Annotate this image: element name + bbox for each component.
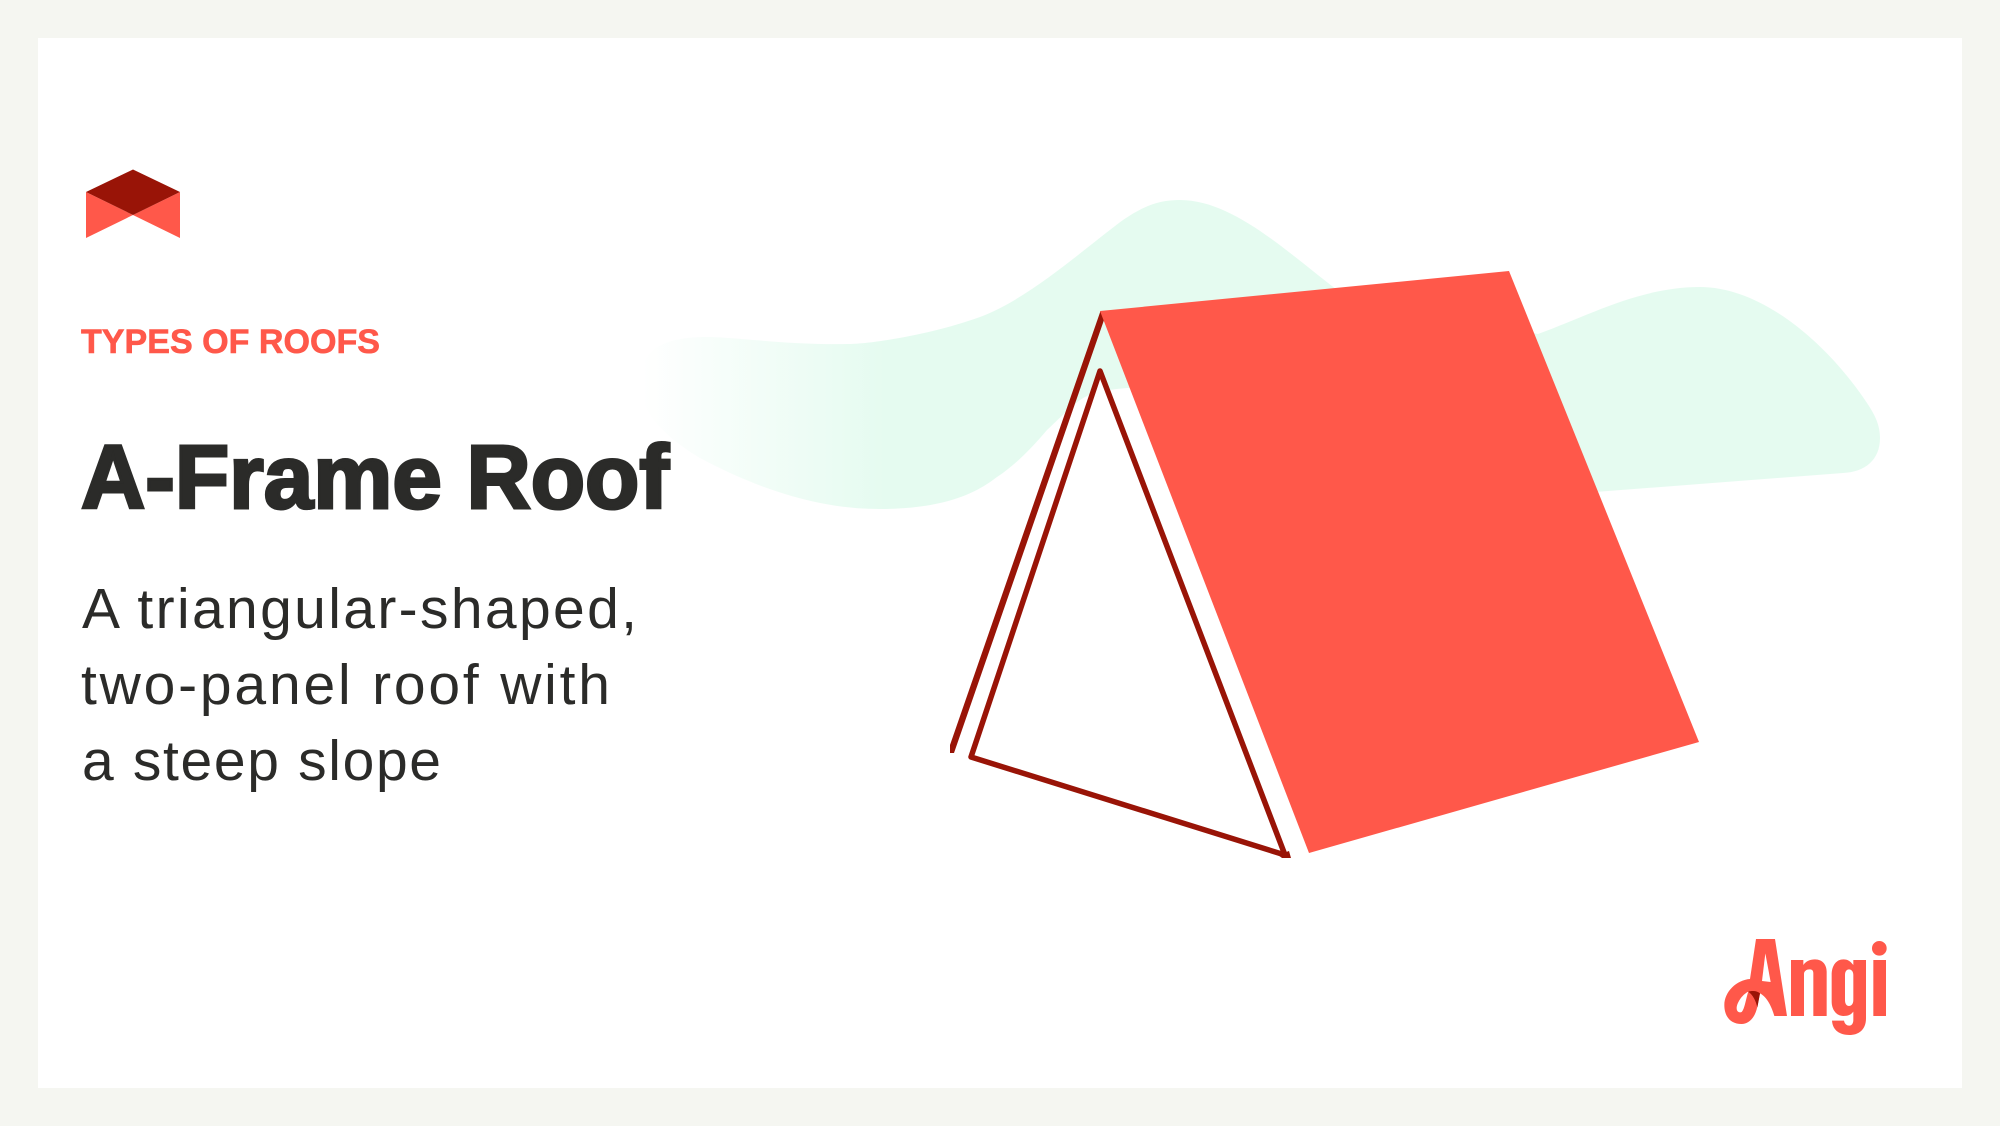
triangular frame outline [971, 371, 1285, 855]
illustration: A-frame house [950, 271, 1699, 858]
mint background blob [640, 200, 1880, 509]
eyebrow heading: TYPES OF ROOFS [81, 323, 380, 361]
description text: A triangular-shaped, [82, 577, 637, 641]
outer left roof edge [950, 311, 1104, 753]
title: A-Frame Roof [81, 428, 670, 528]
description text [81, 577, 637, 793]
Angi logo [1724, 939, 1887, 1035]
red roof panel [1100, 271, 1699, 853]
frame corner tip [1278, 851, 1291, 858]
description text: two-panel roof with [81, 653, 610, 717]
icon: roof logo mark [86, 170, 180, 238]
description text: a steep slope [82, 729, 441, 793]
